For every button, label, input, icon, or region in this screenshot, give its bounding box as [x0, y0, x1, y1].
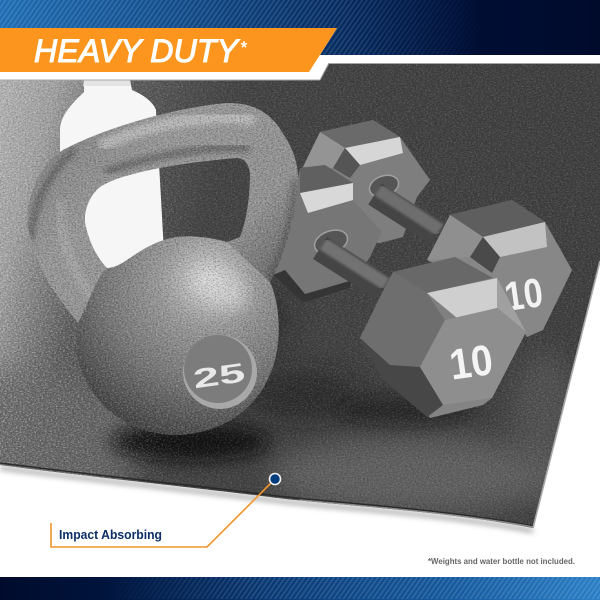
back dumbbell far head	[303, 120, 430, 243]
kettlebell ball	[76, 236, 279, 435]
soft shadow below the mat	[0, 468, 533, 531]
kettlebell	[20, 95, 305, 440]
kettlebell ball highlight	[185, 257, 255, 319]
kettlebell handle	[27, 103, 298, 323]
kettlebell surface grain	[20, 95, 305, 440]
number 25: 25	[191, 357, 247, 394]
callout: impact absorbing	[51, 474, 280, 547]
number 10 on front dumbbell: 10	[447, 336, 496, 390]
back dumbbell near head	[427, 200, 572, 337]
white header notch strip	[0, 28, 600, 80]
title text: HEAVY DUTY	[34, 33, 241, 69]
front dumbbell near head	[360, 257, 526, 418]
water bottle	[60, 80, 165, 270]
front dumbbell bar	[320, 248, 383, 288]
callout leader line	[51, 479, 275, 547]
callout label: Impact Absorbing	[59, 527, 162, 542]
callout dot	[270, 474, 280, 484]
kettlebell base face	[183, 335, 257, 409]
footnote: *Weights and water bottle not included.	[428, 556, 575, 566]
front dumbbell far head	[273, 165, 382, 303]
back dumbbell	[303, 120, 572, 337]
title banner	[0, 28, 337, 72]
back dumbbell bar	[375, 194, 437, 234]
front dumbbell	[273, 165, 526, 418]
number 10 on back dumbbell: 10	[502, 269, 546, 320]
mat right edge	[533, 261, 600, 528]
kettlebell handle shading	[30, 118, 295, 300]
bottom footer band	[0, 577, 600, 600]
top header band	[0, 0, 600, 56]
photo: gym mat	[0, 60, 600, 540]
title asterisk: *	[240, 38, 248, 57]
